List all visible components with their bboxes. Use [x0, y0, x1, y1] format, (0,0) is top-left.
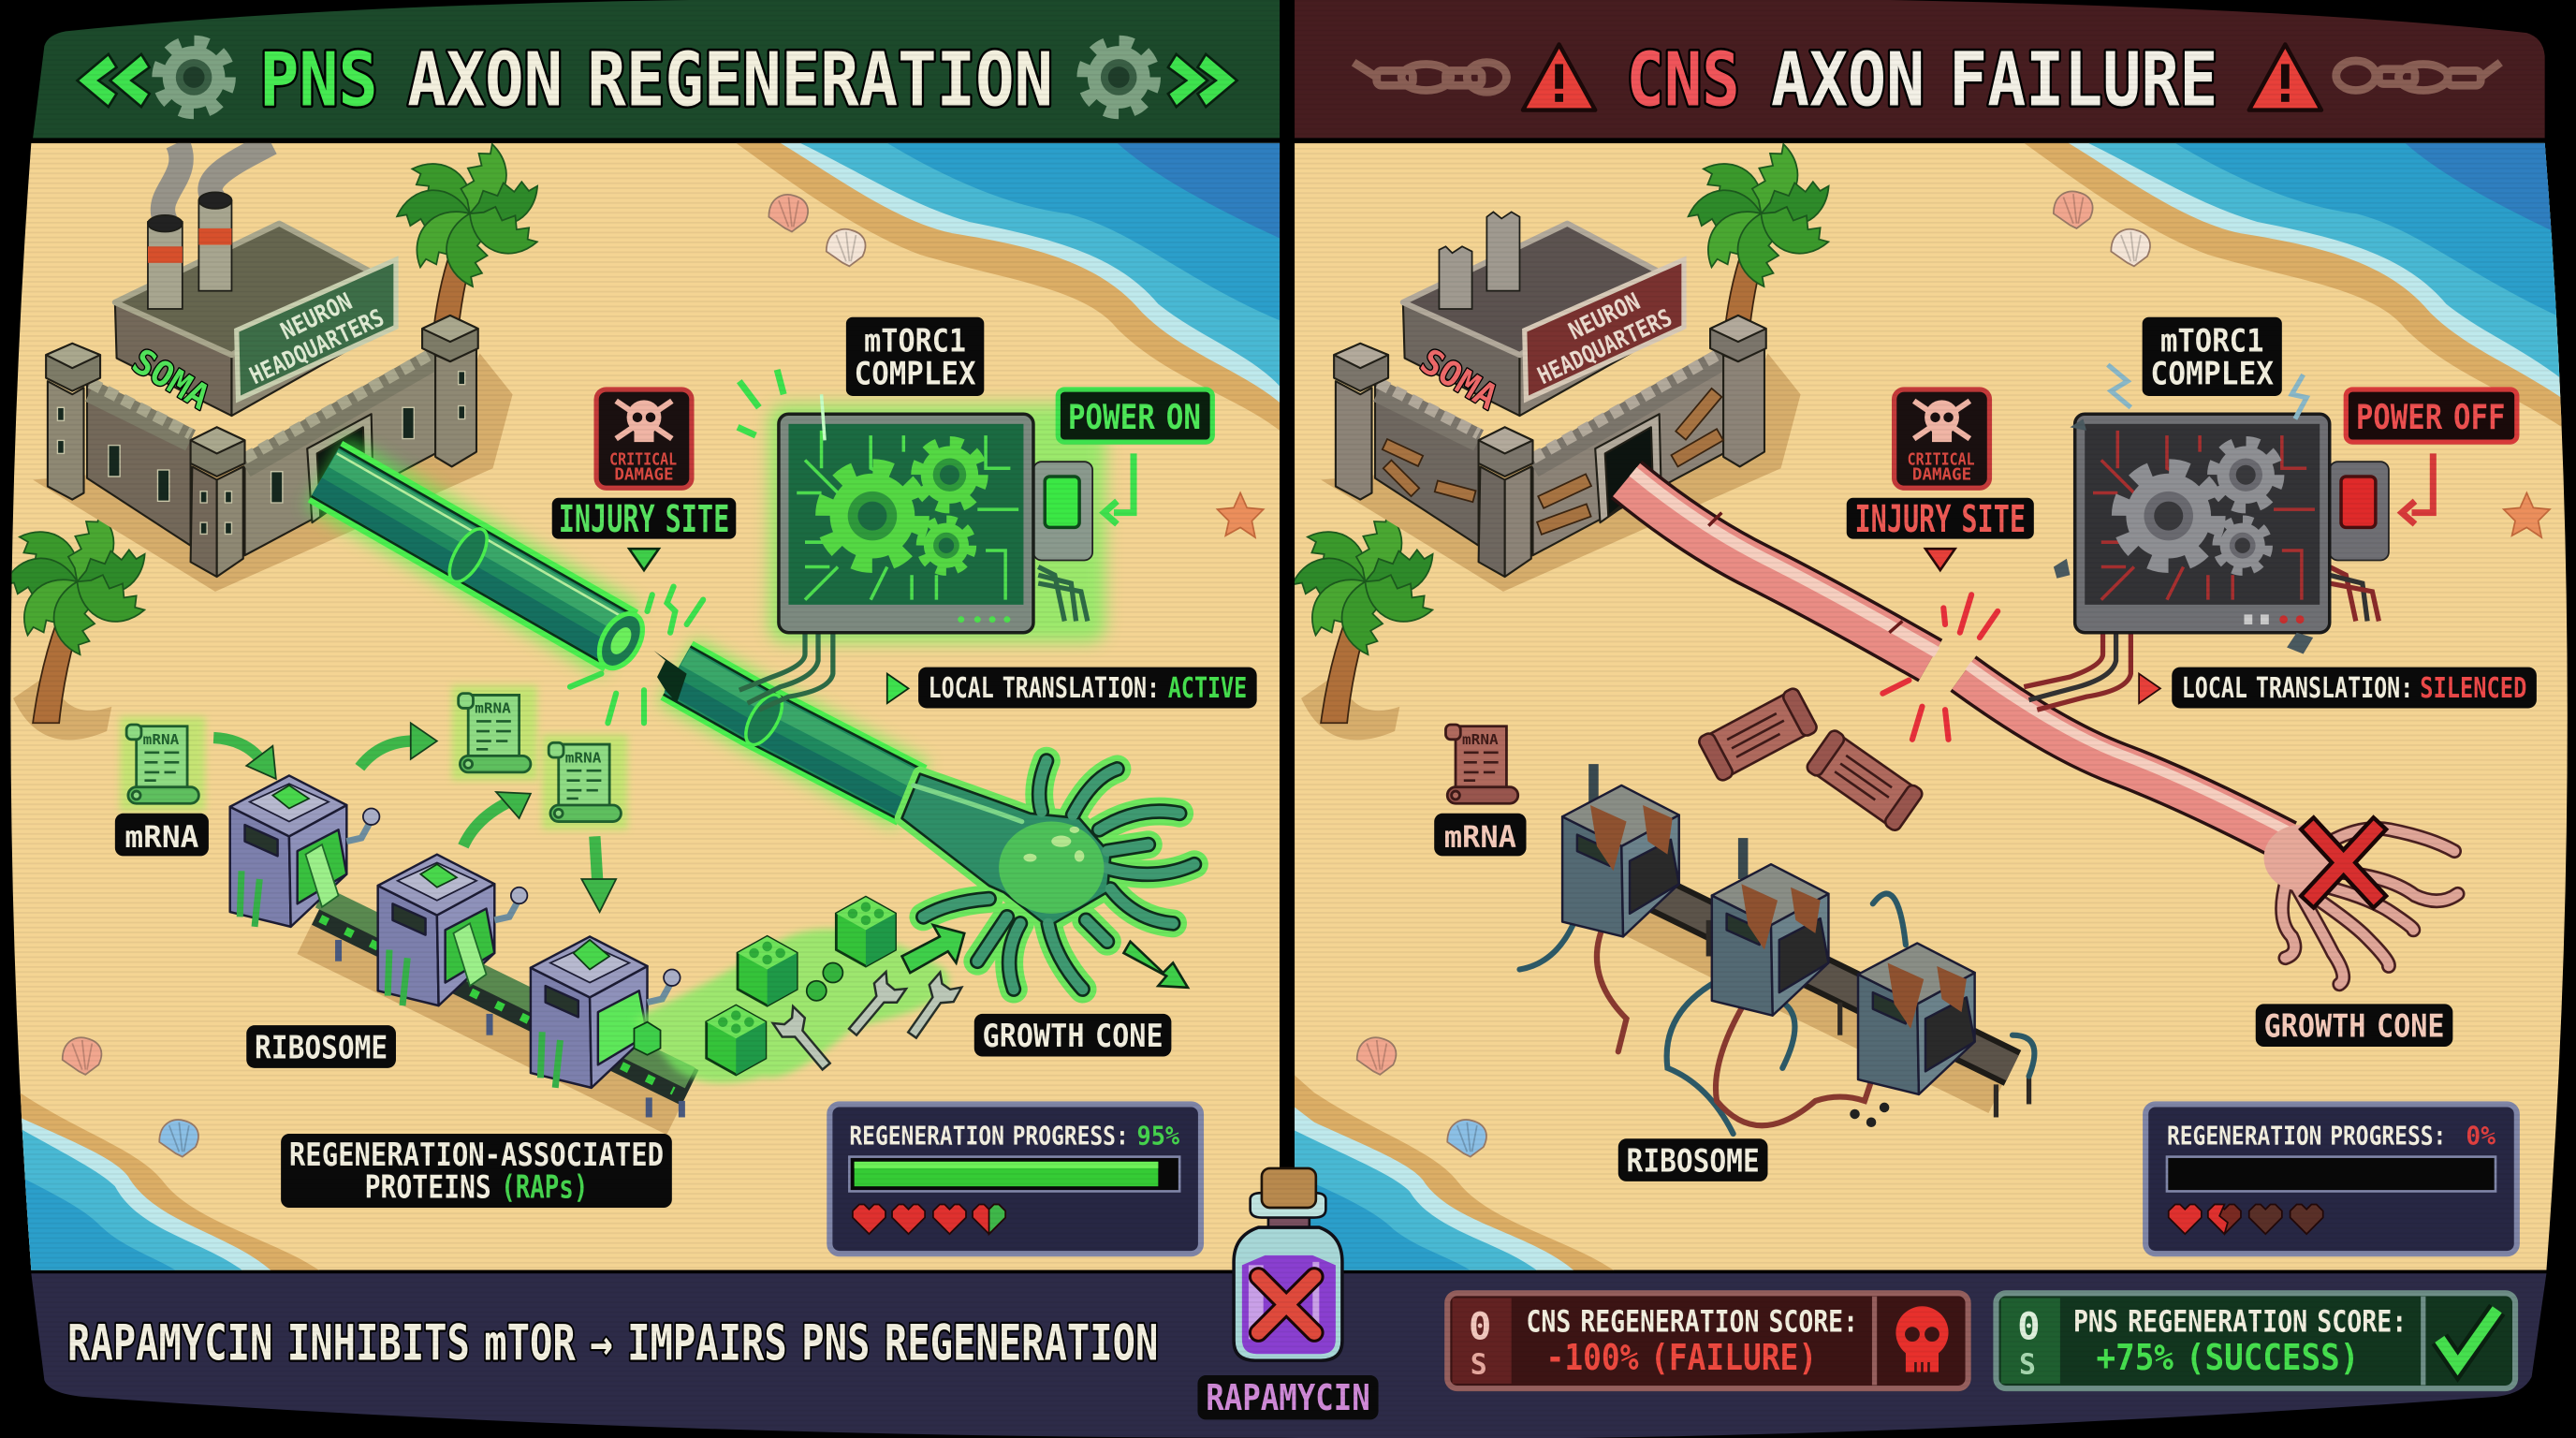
- sign: neuron headquarters: [1525, 259, 1684, 399]
- badge: critical damage: CRITICAL: [1908, 451, 1975, 470]
- score: CNS: 0: [1469, 1304, 1491, 1348]
- icon: left gear: [159, 43, 228, 111]
- badge: critical damage: DAMAGE: [614, 465, 674, 484]
- heading: PNS: PNS: [259, 37, 378, 123]
- boarded windows: [1383, 389, 1723, 535]
- icon: red X: [2313, 829, 2374, 896]
- discarded scrolls: [1697, 686, 1925, 832]
- marker: injury triangle: [629, 549, 659, 570]
- shells and starfish: [1357, 191, 2550, 1157]
- label: mTORC1 complex: COMPLEX: [2150, 356, 2274, 393]
- monitor: mTORC1: [738, 370, 1105, 710]
- score: PNS: [1996, 1293, 2515, 1388]
- score: CNS: [1447, 1293, 1969, 1388]
- panel: CNS beach scene: [1286, 140, 2576, 1273]
- panel: regeneration progress 95: [829, 1104, 1201, 1254]
- icon: check mark: [2439, 1310, 2497, 1365]
- palm tree left: [11, 519, 146, 740]
- label: mRNA: [115, 814, 209, 856]
- icon: skull: [1895, 1306, 1949, 1372]
- label: soma: SOMA: [1413, 341, 1504, 418]
- flow arrows: [213, 723, 616, 912]
- mRNA scroll 3: mRNA: [565, 749, 601, 766]
- hearts: [2169, 1204, 2323, 1234]
- panel: regeneration progress 0: REGENERATION PROGRESS:: [2167, 1122, 2446, 1151]
- header: PNS axon regeneration: [33, 0, 1280, 138]
- label: local translation silenced: [2139, 668, 2537, 708]
- label: mTORC1 complex: mTORC1: [2160, 323, 2264, 360]
- sign: neuron headquarters: HEADQUARTERS: [245, 303, 388, 389]
- label: soma: SOMA: [125, 341, 216, 418]
- label: mTORC1 complex: mTORC1: [864, 323, 966, 360]
- axon segment distal: [654, 651, 920, 809]
- panel: regeneration progress 0: [2145, 1104, 2517, 1254]
- arrow: power on pointer: [1104, 453, 1134, 524]
- chimneys: [148, 192, 231, 309]
- debris: [1850, 1103, 1889, 1127]
- label: growth cone: GROWTH CONE: [2264, 1007, 2445, 1045]
- mRNA scroll 2: mRNA: [475, 700, 511, 717]
- panel: PNS beach scene: [0, 140, 1280, 1273]
- label: local translation silenced: SILENCED: [2420, 672, 2526, 705]
- ribosome machine 1 rusted: [1562, 764, 1679, 936]
- ribosome machine 2 rusted: [1712, 838, 1828, 1016]
- mRNA scroll: mRNA: [1462, 731, 1499, 748]
- ocean top right: [736, 143, 1280, 431]
- icon: right broken chain: [2336, 61, 2500, 91]
- palm tree left: [1289, 508, 1442, 740]
- label: injury site: INJURY SITE: [1855, 497, 2026, 541]
- cables: [739, 567, 1088, 710]
- ocean top right: [2024, 143, 2576, 444]
- panel: regeneration progress 0: 0%: [2466, 1122, 2496, 1151]
- label: rapamycin: RAPAMYCIN: [1206, 1377, 1370, 1419]
- sign: neuron headquarters: [237, 259, 396, 399]
- marker: injury triangle: [1925, 549, 1955, 570]
- sign: neuron headquarters: NEURON: [276, 286, 357, 345]
- ribosome machine 2: [378, 855, 527, 1005]
- icon: left broken chain: [1354, 63, 1506, 92]
- ocean bottom left: [21, 1093, 319, 1270]
- badge: critical damage: [596, 389, 692, 488]
- mRNA scroll 1: [120, 716, 205, 812]
- label: regeneration-associated proteins: (RAPs): [501, 1168, 588, 1206]
- bottle: rapamycin: [1234, 1168, 1342, 1360]
- score: PNS: +75% (SUCCESS): [2097, 1337, 2359, 1379]
- label: ribosome: RIBOSOME: [1627, 1142, 1760, 1180]
- score: CNS: S: [1471, 1348, 1487, 1381]
- icon: left chevrons: [77, 54, 150, 107]
- label: mRNA: [1434, 814, 1526, 856]
- mRNA scroll 3: [542, 735, 627, 829]
- shells and starfish: [63, 195, 1264, 1157]
- conveyor belt broken: [1630, 888, 2029, 1117]
- injury sparks: [1882, 594, 1998, 740]
- label: local translation active: [887, 668, 1257, 708]
- score: PNS: PNS REGENERATION SCORE:: [2073, 1306, 2407, 1340]
- mRNA scroll: [1445, 725, 1518, 803]
- header: CNS axon failure: [1295, 0, 2545, 138]
- label: regeneration-associated proteins: PROTEINS: [365, 1168, 491, 1206]
- label: mTORC1 complex: COMPLEX: [855, 356, 976, 393]
- green protein stream: [633, 929, 949, 1083]
- monitor: mTORC1 off: [2024, 365, 2389, 710]
- label: local translation silenced: LOCAL TRANSLATION:: [2182, 672, 2413, 705]
- axon segment distal damaged: [1963, 666, 2291, 842]
- label: power on: POWER ON: [1068, 397, 1201, 437]
- label: power off: [2346, 389, 2517, 442]
- windows: [57, 372, 465, 534]
- heading: axon failure: AXON FAILURE: [1771, 37, 2217, 123]
- ribosome machine 1: [230, 775, 379, 927]
- sign: neuron headquarters: HEADQUARTERS: [1533, 303, 1676, 389]
- label: mTORC1 complex: [2143, 317, 2282, 396]
- label: ribosome: RIBOSOME: [255, 1029, 388, 1066]
- mRNA scroll 2: [452, 685, 537, 781]
- RAP blocks and tools: [634, 897, 963, 1076]
- score: PNS: S: [2019, 1348, 2036, 1381]
- icon: right chevrons: [1168, 54, 1237, 107]
- panel: regeneration progress 95: 95%: [1137, 1122, 1180, 1151]
- badge: critical damage: CRITICAL: [609, 451, 677, 470]
- icon: right gear: [1084, 43, 1153, 111]
- injury sparks: [570, 587, 703, 723]
- conveyor belt: [307, 897, 690, 1117]
- building: soma factory: [33, 143, 513, 592]
- hearts: [853, 1204, 1005, 1234]
- footer bar: [31, 1273, 2546, 1438]
- label: mRNA: mRNA: [1444, 821, 1516, 855]
- badge: critical damage: [1895, 389, 1989, 488]
- score: CNS: CNS REGENERATION SCORE:: [1526, 1306, 1858, 1340]
- label: local translation active: LOCAL TRANSLATION:: [929, 672, 1160, 705]
- icon: left warning triangle: [1523, 44, 1595, 110]
- icon: red X: [1258, 1277, 1314, 1332]
- icon: right warning triangle: [2249, 44, 2321, 110]
- label: injury site: INJURY SITE: [559, 497, 729, 541]
- label: growth cone: GROWTH CONE: [983, 1018, 1164, 1055]
- caption: rapamycin inhibits mTOR: RAPAMYCIN INHIBITS mTOR → IMPAIRS PNS REGENERATION: [67, 1314, 1158, 1372]
- label: regeneration-associated proteins: REGENERATION-ASSOCIATED: [289, 1137, 664, 1174]
- heading: CNS: CNS: [1627, 37, 1740, 123]
- arrow: power off pointer: [2402, 453, 2433, 524]
- score: PNS: 0: [2017, 1304, 2041, 1348]
- label: regeneration-associated proteins: [281, 1134, 672, 1208]
- smoke: [163, 143, 271, 222]
- divider between panels: [1280, 0, 1295, 1273]
- broken cables: [1519, 888, 2034, 1134]
- label: power on: [1058, 389, 1212, 442]
- palm tree top: [1685, 140, 1838, 329]
- score: CNS: -100% (FAILURE): [1546, 1337, 1817, 1379]
- building: damaged soma: [1321, 212, 1801, 592]
- label: mRNA: mRNA: [124, 821, 198, 855]
- growth cone damaged: [2264, 825, 2458, 984]
- palm tree top: [395, 142, 539, 322]
- label: mTORC1 complex: [846, 317, 984, 396]
- panel: regeneration progress 95: REGENERATION PROGRESS:: [849, 1122, 1129, 1151]
- axon segment proximal: [317, 453, 651, 676]
- label: power off: POWER OFF: [2356, 397, 2506, 437]
- heading: axon regeneration: AXON REGENERATION: [407, 37, 1053, 123]
- arrows: growth direction: [902, 925, 1188, 988]
- sign: neuron headquarters: NEURON: [1564, 286, 1645, 345]
- label: local translation active: ACTIVE: [1168, 672, 1247, 705]
- mRNA scroll 1: mRNA: [143, 731, 179, 748]
- growth cone: [902, 761, 1194, 990]
- axon segment proximal damaged: [1627, 472, 1937, 661]
- cables: [2024, 567, 2378, 710]
- ribosome machine 3 rusted: [1858, 943, 1975, 1094]
- ocean bottom left: [1286, 1068, 1618, 1273]
- ribosome machine 3: [531, 936, 681, 1088]
- chimneys: [1439, 212, 1519, 309]
- badge: critical damage: DAMAGE: [1912, 465, 1971, 484]
